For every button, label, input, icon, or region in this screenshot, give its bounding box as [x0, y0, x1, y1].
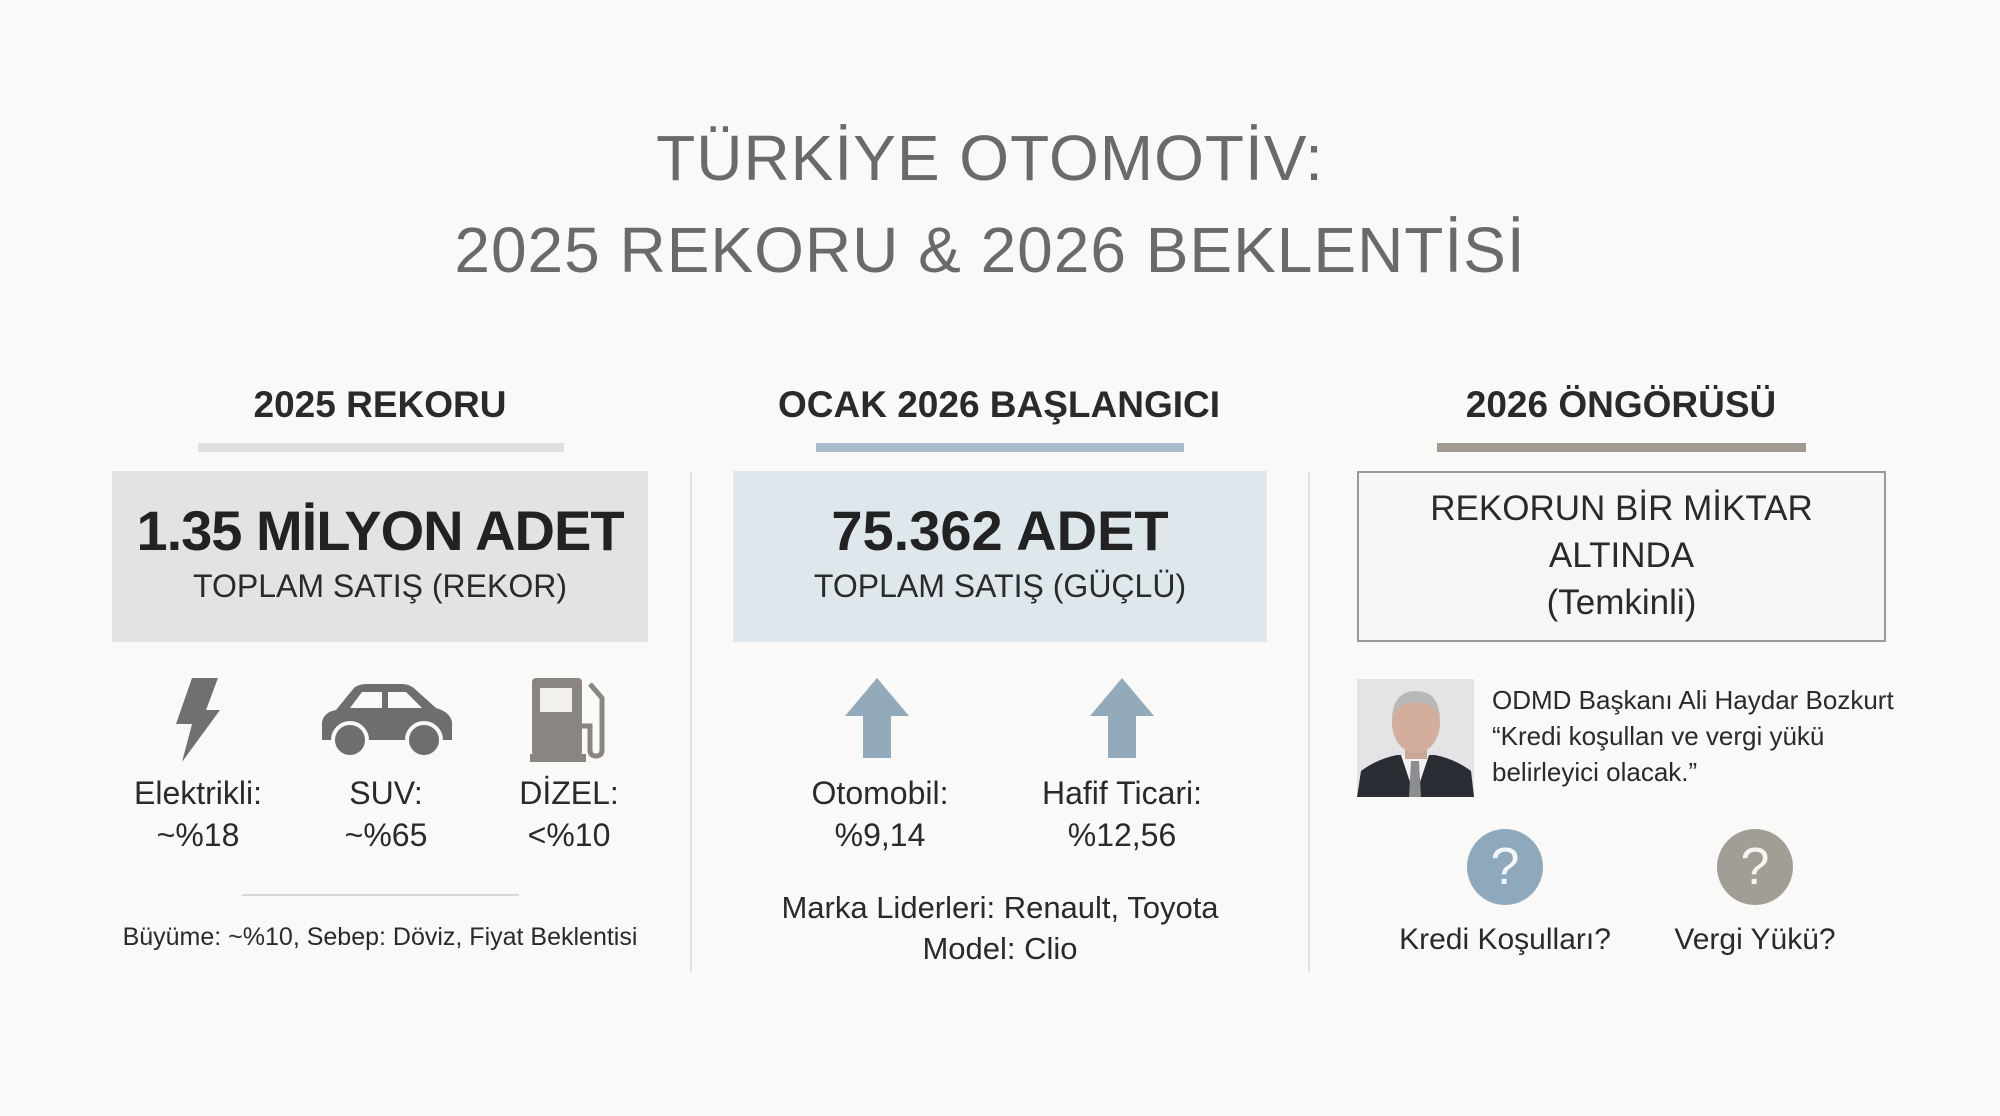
stat: dizel: <%10	[528, 817, 610, 853]
icon: question taupe	[1717, 829, 1793, 905]
forecast box: (Temkinli)	[1547, 583, 1696, 622]
arrow up: hafif ticari	[1090, 678, 1154, 758]
quote: belirleyici olacak.”	[1492, 757, 1697, 787]
icon: question blue	[1467, 829, 1543, 905]
stat: otomobil: Otomobil:	[812, 775, 948, 811]
sales box: TOPLAM SATIŞ (GÜÇLÜ)	[814, 568, 1186, 604]
text: brand leaders: Marka Liderleri: Renault, Toyota	[781, 890, 1219, 925]
quote: ODMD Başkanı Ali Haydar Bozkurt	[1492, 685, 1894, 715]
record box	[112, 471, 648, 642]
record box: 1.35 MİLYON ADET	[136, 499, 624, 562]
underline	[1437, 443, 1806, 452]
stat: elektrikli	[134, 775, 262, 853]
stat: otomobil: %9,14	[835, 817, 925, 853]
heading: 2025 REKORU	[254, 384, 506, 425]
stat: otomobil	[812, 775, 948, 853]
icon: fuel pump	[530, 678, 604, 762]
label: vergi: Vergi Yükü?	[1674, 923, 1836, 956]
forecast box	[1357, 471, 1886, 642]
column divider right	[1308, 472, 1310, 972]
icon: lightning	[176, 678, 220, 762]
column divider left	[690, 472, 692, 972]
stat: hafif ticari	[1042, 775, 1202, 853]
forecast box: REKORUN BİR MİKTAR	[1430, 489, 1813, 528]
forecast box: ALTINDA	[1549, 536, 1694, 575]
panel: ocak 2026	[733, 384, 1267, 966]
quote: “Kredi koşullan ve vergi yükü	[1492, 721, 1824, 751]
small divider	[242, 894, 519, 896]
stat: SUV	[345, 775, 427, 853]
panel: 2025 rekoru	[112, 384, 648, 951]
stat: elektrikli: ~%18	[157, 817, 239, 853]
sales box: 75.362 ADET	[831, 499, 1169, 562]
text: brand leaders	[781, 890, 1219, 966]
underline	[816, 443, 1184, 452]
panel: 2026 öngörüsü	[1357, 384, 1894, 956]
sales box	[733, 471, 1267, 642]
stat: elektrikli: Elektrikli:	[134, 775, 262, 811]
icon: question taupe: ?	[1741, 838, 1769, 896]
stat: dizel: DİZEL:	[519, 775, 619, 811]
stat: hafif ticari: %12,56	[1068, 817, 1176, 853]
record box: TOPLAM SATIŞ (REKOR)	[193, 568, 567, 604]
stat: dizel	[519, 775, 619, 853]
stat: hafif ticari: Hafif Ticari:	[1042, 775, 1202, 811]
note: growth: Büyüme: ~%10, Sebep: Döviz, Fiyat Beklentisi	[123, 923, 637, 951]
stat: SUV: ~%65	[345, 817, 427, 853]
title: TÜRKİYE OTOMOTİV:	[656, 122, 1324, 194]
stat: SUV: SUV:	[349, 775, 423, 811]
label: kredi: Kredi Koşulları?	[1399, 923, 1611, 956]
photo: Ali Haydar Bozkurt	[1357, 679, 1474, 797]
underline	[198, 443, 564, 452]
text: brand leaders: Model: Clio	[922, 931, 1078, 966]
icon: question blue: ?	[1491, 838, 1519, 896]
quote	[1492, 685, 1894, 787]
title	[454, 122, 1526, 286]
icon: car	[322, 684, 452, 755]
heading: 2026 ÖNGÖRÜSÜ	[1466, 384, 1776, 425]
heading: OCAK 2026 BAŞLANGICI	[778, 384, 1220, 425]
title: 2025 REKORU & 2026 BEKLENTİSİ	[454, 214, 1526, 286]
arrow up: otomobil	[845, 678, 909, 758]
